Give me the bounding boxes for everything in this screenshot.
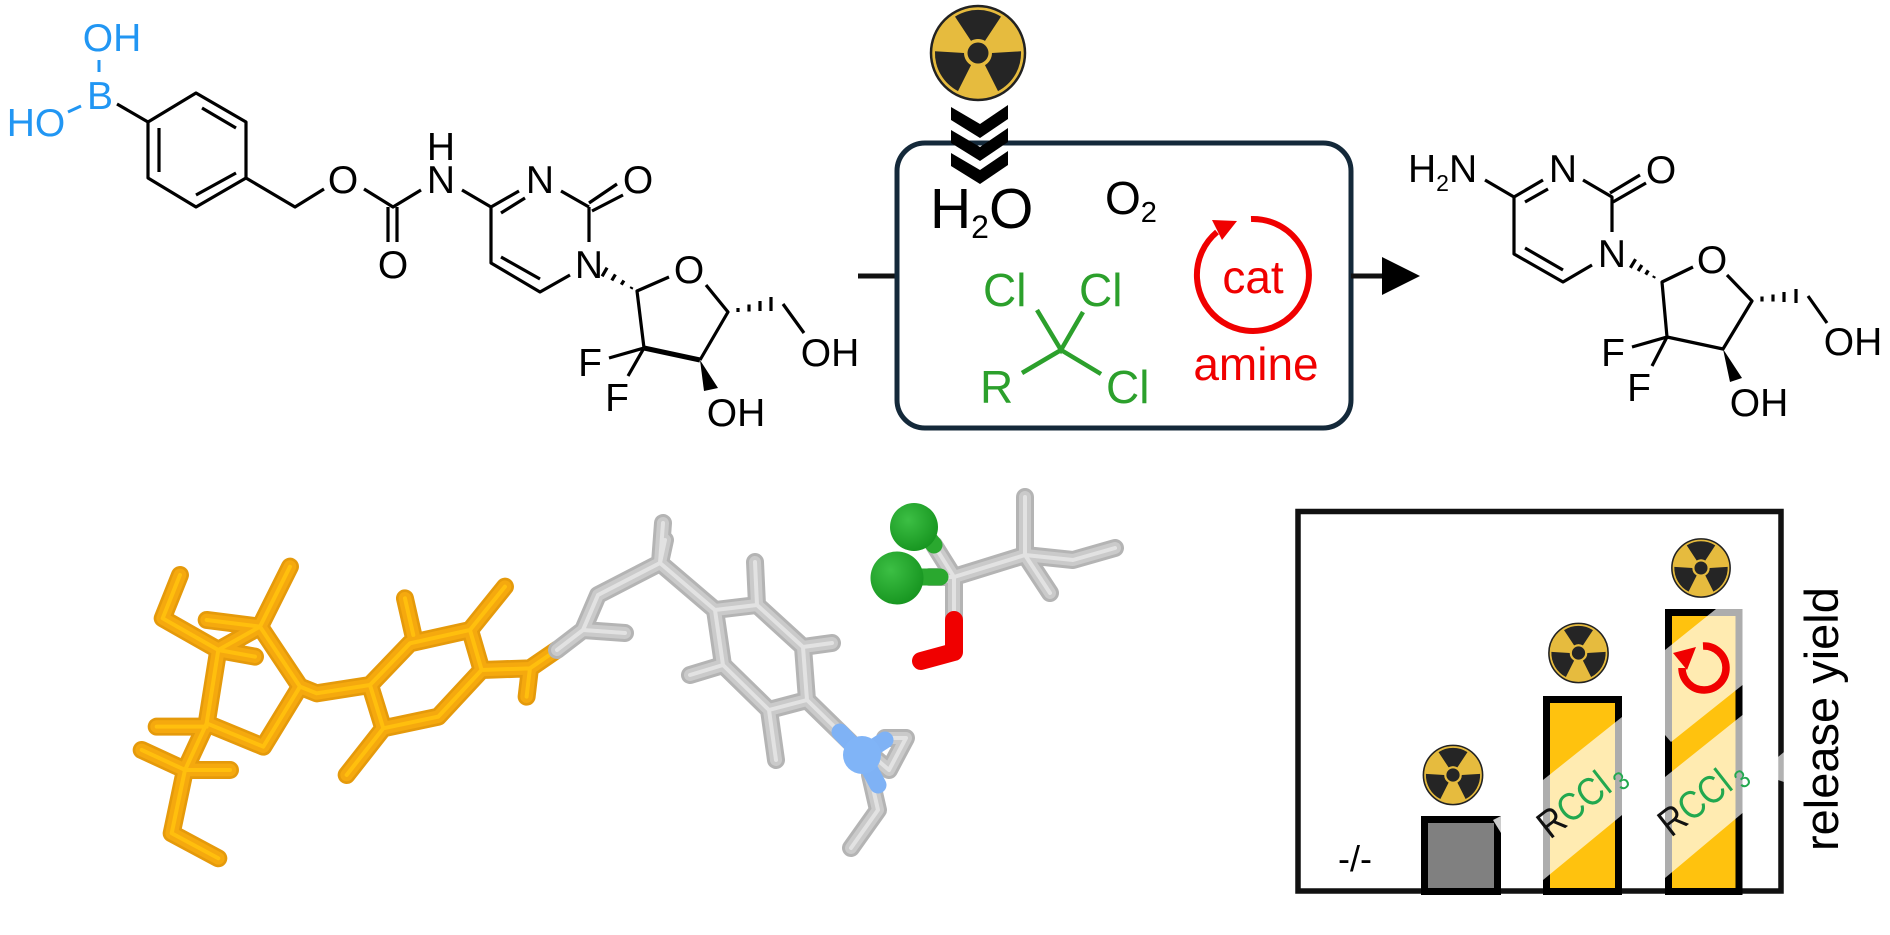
bar: radiation only <box>1424 816 1501 892</box>
atom labels <box>328 126 859 435</box>
icon: catalytic cycle in bar 3 <box>1673 646 1726 690</box>
atom labels: F <box>578 342 602 385</box>
trichloro compound RCCl3: Cl <box>1106 361 1149 413</box>
hydroxyl oxygen <box>921 620 954 661</box>
3D model: grey amine fragment <box>557 523 906 848</box>
atom labels: N <box>427 159 455 202</box>
icon: radiation bar 3 <box>1671 539 1731 597</box>
text: water: 2 <box>971 209 989 245</box>
icon: radiation bar 1 <box>1422 745 1484 805</box>
atom labels: N <box>575 244 603 287</box>
atom labels: O <box>1646 149 1676 192</box>
3D model: orange substrate fragment <box>142 567 557 858</box>
right molecule: released gemcitabine <box>1408 148 1882 425</box>
atom labels <box>1408 148 1882 425</box>
trichloro compound RCCl3 <box>980 264 1149 413</box>
atom labels: O <box>1697 239 1727 282</box>
boronic acid group: HO <box>7 102 65 145</box>
catalytic amine cycle: amine <box>1193 338 1319 390</box>
trichloro compound RCCl3: R <box>980 361 1013 413</box>
label: RCCl3 bar 2: 3 <box>1608 766 1636 797</box>
bar: radiation plus RCCl3 plus amine <box>1665 609 1742 892</box>
3D model: trichloro reagent fragment <box>870 497 1115 661</box>
arrow: chevrons pointing down <box>951 105 1008 184</box>
frame highlight <box>1778 752 1784 782</box>
nitrogen atom <box>840 732 885 785</box>
trichloro compound RCCl3: Cl <box>1079 264 1122 316</box>
axis label: release yield: release yield <box>1795 587 1848 851</box>
atom labels: O <box>623 159 653 202</box>
boronic acid group: B <box>87 75 113 118</box>
atom labels: H <box>1408 148 1436 191</box>
catalytic amine cycle <box>1193 219 1319 390</box>
atom labels: OH <box>801 332 859 375</box>
icon: radiation symbol <box>929 6 1027 100</box>
catalytic amine cycle: cat <box>1222 251 1284 303</box>
sugar ring bonds <box>602 268 804 391</box>
atom labels: O <box>328 159 358 202</box>
atom labels: F <box>1601 332 1625 375</box>
chlorine atoms <box>870 503 940 604</box>
atom labels: O <box>378 244 408 287</box>
left molecule: boronic ester prodrug <box>7 17 859 435</box>
icon: radiation bar 2 <box>1548 623 1609 683</box>
atom labels: N <box>1598 233 1626 276</box>
atom labels: OH <box>707 392 765 435</box>
bar chart: release yield <box>1298 512 1784 892</box>
benzyl carbamate and pyrimidine skeleton <box>117 93 623 292</box>
text: oxygen: O <box>1105 172 1141 224</box>
atom labels: 2 <box>1436 170 1449 196</box>
boronic acid group: OH <box>83 17 141 60</box>
atom labels: N <box>526 159 554 202</box>
atom labels: N <box>1449 148 1477 191</box>
atom labels: N <box>1549 148 1577 191</box>
arrow: to product <box>1351 257 1420 295</box>
atom labels: O <box>674 249 704 292</box>
atom labels: H <box>427 126 455 169</box>
label: RCCl3 bar 2: RCCl <box>1528 762 1619 847</box>
label: RCCl3 bar 3: RCCl <box>1649 760 1740 845</box>
chart frame <box>1298 512 1781 891</box>
label: RCCl3 bar 3: 3 <box>1729 764 1757 795</box>
reaction line from substrate to box <box>858 274 897 278</box>
text: water: O <box>989 177 1033 241</box>
panel: reaction conditions box <box>897 143 1351 428</box>
text: oxygen: 2 <box>1141 197 1157 229</box>
atom labels: F <box>1627 367 1651 410</box>
bar: radiation plus RCCl3 <box>1543 700 1622 892</box>
atom labels: OH <box>1824 321 1882 364</box>
skeleton bonds <box>1485 175 1827 366</box>
label: no additive: -/- <box>1338 838 1372 879</box>
boronic acid group <box>7 17 141 145</box>
text: water: H <box>930 177 971 241</box>
stereo bonds <box>1630 259 1796 382</box>
atom labels: OH <box>1730 382 1788 425</box>
trichloro compound RCCl3: Cl <box>983 264 1026 316</box>
atom labels: F <box>605 377 629 420</box>
